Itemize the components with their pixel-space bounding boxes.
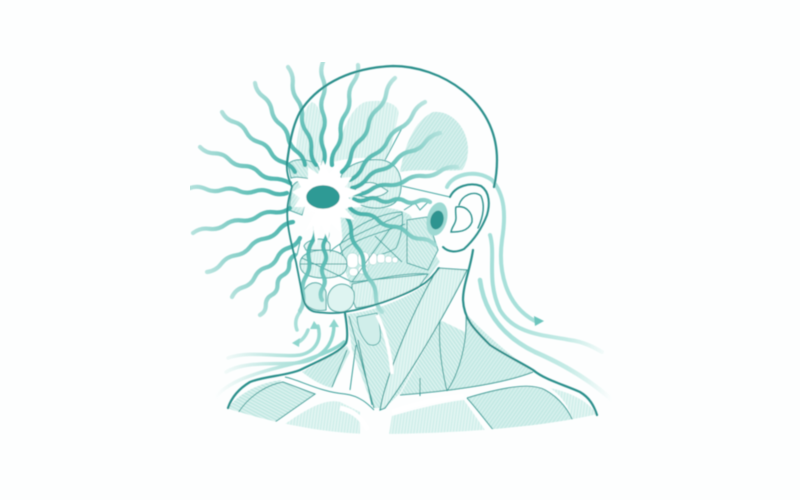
muscle: lower face fill [340,207,440,310]
muscle: right pectoral [388,400,492,440]
arrowheads: left airflow [292,319,339,347]
neck and shoulder muscles [228,268,597,440]
muscle: right deltoid [467,387,574,432]
arrow: small ray end [296,312,300,330]
muscle: nasal ala [304,239,330,250]
white collar gutters [340,405,360,422]
muscle: trachea gland [357,313,380,345]
infographic: head and neck muscles with radiating pain [190,62,606,434]
muscle: brow [288,160,320,180]
arrows: right airflow [447,174,612,400]
muscle: trapezius left [302,346,350,388]
illustration group [190,62,612,440]
icon: glowing eye focal point [305,184,341,210]
muscle: right shoulder outer [550,388,597,424]
muscle: inner eye [355,183,388,197]
muscle: lips [300,250,347,278]
white glow around eye [292,160,362,246]
muscle: temporalis and frontalis fans [296,101,468,172]
muscle: neck side [400,320,467,395]
neck lines [238,312,574,432]
head outline [228,66,597,415]
muscle: orbicularis around eye [341,160,401,208]
muscle: trapezius right [448,312,533,391]
face muscles [288,128,450,312]
muscle: throat [346,278,431,408]
icon: ear [443,184,489,251]
muscle: left deltoid [238,382,315,422]
muscle: masseter [407,217,438,270]
muscle: chin [304,283,326,311]
muscle: lower jaw [352,274,428,308]
icon: trigger point near jaw joint [423,200,451,238]
back neck and right shoulder contour [463,250,597,415]
teeth [347,252,398,276]
white windpipe gap [377,315,392,374]
muscle: sternocleidomastoid [380,268,467,410]
radiating wavy pain lines [190,62,457,315]
muscle: cheek zygomatic [340,212,403,262]
muscle: left shoulder outer [228,380,282,413]
muscle: left pectoral [285,401,360,440]
face contour [287,163,439,313]
muscle: nasal [289,180,312,215]
facial fibre lines [297,128,450,282]
arrows: left airflow [212,312,344,402]
skull contour [287,66,497,187]
front neck and left shoulder contour [228,313,347,408]
arrowhead: right airflow [534,316,544,326]
